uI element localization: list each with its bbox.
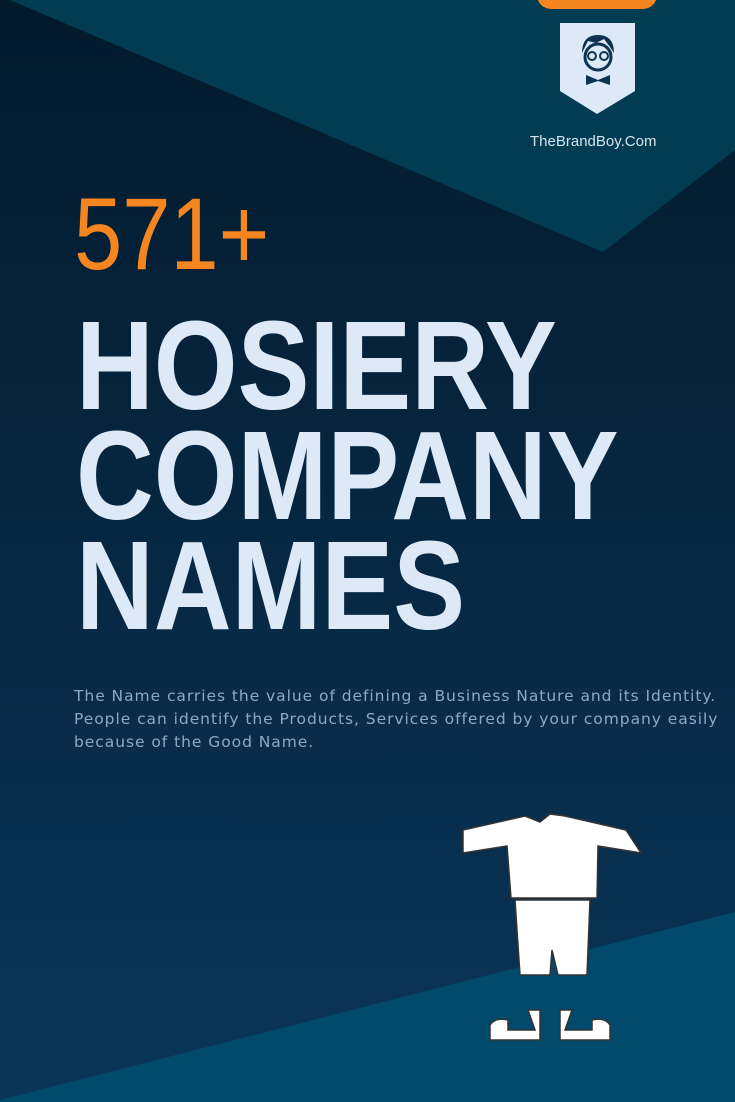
orange tab bbox=[537, 0, 657, 9]
description bbox=[74, 687, 718, 751]
icon: clothing bbox=[462, 813, 642, 1041]
logo badge bbox=[560, 23, 635, 114]
title: COMPANY bbox=[76, 405, 619, 546]
title: HOSIERY bbox=[76, 295, 557, 436]
title: NAMES bbox=[76, 515, 465, 656]
description: The Name carries the value of defining a Business Nature and its Identity. bbox=[74, 687, 716, 705]
description: because of the Good Name. bbox=[74, 733, 314, 751]
site name: TheBrandBoy.Com bbox=[530, 133, 656, 150]
title bbox=[76, 295, 619, 656]
count: 571+ bbox=[74, 177, 269, 291]
description: People can identify the Products, Services offered by your company easily bbox=[74, 710, 718, 728]
